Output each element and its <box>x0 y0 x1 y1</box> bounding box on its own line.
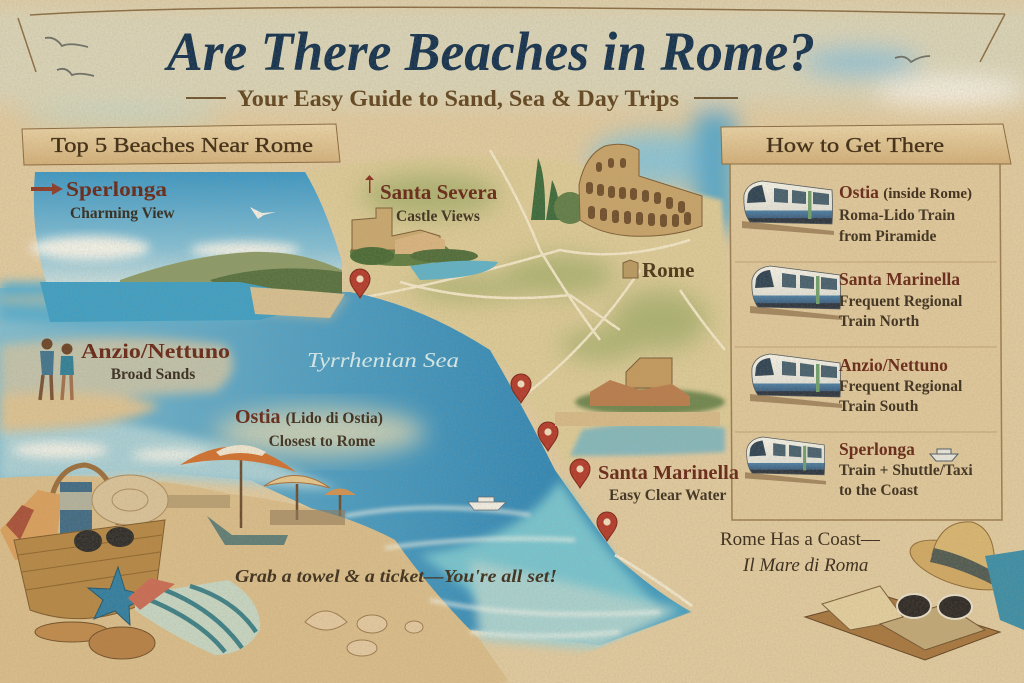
route: Ostia: Roma-Lido Train <box>839 207 956 224</box>
label: Santa Severa: Santa Severa <box>380 180 498 204</box>
map pins <box>350 269 617 541</box>
label: Anzio/Nettuno: Anzio/Nettuno <box>81 339 230 363</box>
icon: boat <box>468 497 506 510</box>
route: Anzio/Nettuno: Anzio/Nettuno <box>839 355 948 375</box>
label: Ostia: Ostia (Lido di Ostia) <box>235 406 383 428</box>
route: Sperlonga: Sperlonga <box>839 439 915 459</box>
label: Sperlonga: Sperlonga <box>66 177 168 201</box>
label: Sperlonga: Charming View <box>70 205 175 222</box>
subtitle: Your Easy Guide to Sand, Sea & Day Trips <box>237 86 679 111</box>
icon: map, book and sunglasses <box>805 586 1000 660</box>
label: Tyrrhenian Sea: Tyrrhenian Sea <box>307 348 459 372</box>
icon: straw hat <box>904 522 1024 630</box>
route: Santa Marinella: Frequent Regional <box>839 293 963 310</box>
route: Santa Marinella: Santa Marinella <box>839 269 960 289</box>
icon: couple walking <box>40 338 74 400</box>
caption: Grab a towel & a ticket—You're all set! <box>235 566 557 586</box>
sandy strips <box>0 292 350 432</box>
label: Ostia: Closest to Rome <box>269 433 375 450</box>
route: Ostia: Ostia (inside Rome) <box>839 182 972 202</box>
icon: seashells <box>305 611 423 656</box>
label: Ostia <box>235 406 383 450</box>
route: Sperlonga <box>745 437 973 499</box>
heading <box>721 124 1011 164</box>
route: Anzio/Nettuno: Frequent Regional <box>839 378 963 395</box>
icon: beach basket <box>0 465 168 619</box>
route: Sperlonga: Train + Shuttle/Taxi <box>839 462 973 479</box>
closing note <box>720 529 881 576</box>
label: Santa Marinella: Santa Marinella <box>598 462 739 484</box>
icon: castle <box>350 208 498 280</box>
heading: Top 5 Beaches: Top 5 Beaches Near Rome <box>51 133 313 157</box>
route: Santa Marinella <box>750 266 963 330</box>
surf foam <box>345 508 660 636</box>
heading: Top 5 Beaches <box>22 124 340 165</box>
panel: How to Get There <box>721 124 1011 520</box>
label: Santa Marinella <box>598 462 739 504</box>
label: Santa Severa <box>365 175 498 225</box>
label: Rome: Rome <box>642 258 694 282</box>
icon: Colosseum <box>531 144 702 236</box>
label: Sperlonga <box>31 177 175 222</box>
heading: How to Get There <box>766 133 944 157</box>
route: Santa Marinella: Train North <box>839 313 920 330</box>
map land <box>305 150 735 470</box>
icon: striped towel <box>128 578 260 655</box>
sea <box>0 282 692 650</box>
sky wash behind title <box>0 5 1024 230</box>
title <box>18 7 1005 82</box>
route: Ostia: from Piramide <box>839 228 937 245</box>
route: Anzio/Nettuno <box>750 354 963 415</box>
route: Ostia <box>742 181 972 245</box>
title: Are There Beaches in Rome? <box>164 21 815 82</box>
icon: beach umbrellas and chairs <box>165 445 356 545</box>
label: Anzio/Nettuno <box>81 339 230 383</box>
route: Anzio/Nettuno: Train South <box>839 398 919 415</box>
label: Santa Marinella: Easy Clear Water <box>609 487 727 504</box>
label: Anzio/Nettuno: Broad Sands <box>111 366 195 383</box>
closing note: Il Mare di Roma <box>742 555 868 576</box>
beach foreground <box>0 476 510 683</box>
icon: coastal village <box>555 358 725 426</box>
icon: seagulls <box>45 38 930 76</box>
label: Santa Severa: Castle Views <box>396 208 480 225</box>
closing note: Rome Has a Coast— <box>720 529 881 550</box>
panel: Sperlonga scene <box>30 172 350 322</box>
icon: flip flops <box>35 622 155 659</box>
route: Sperlonga: to the Coast <box>839 482 919 499</box>
icon: starfish <box>88 567 148 625</box>
map right lower land <box>500 422 1024 683</box>
